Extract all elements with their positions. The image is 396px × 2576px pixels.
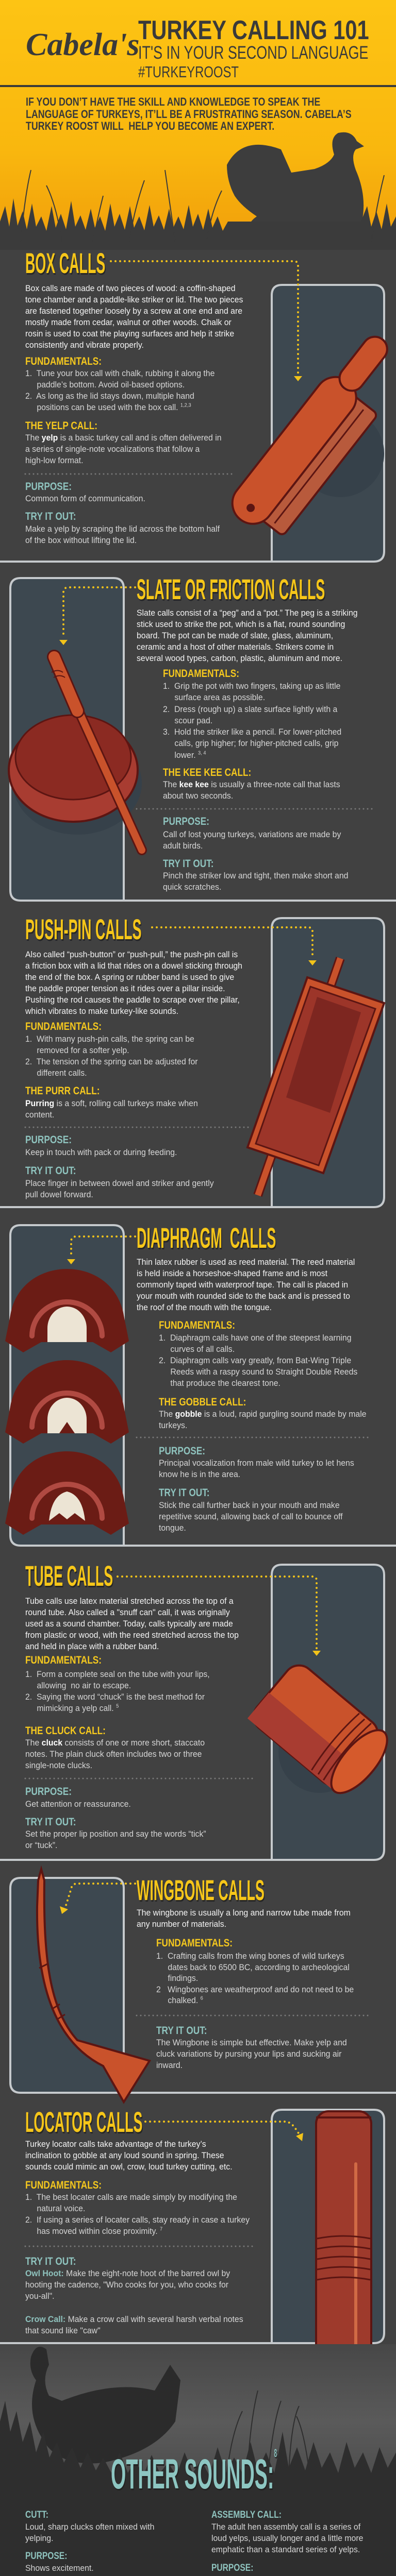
push-pin fundamentals label: FUNDAMENTALS: xyxy=(25,1021,102,1032)
text: Shows excitement. xyxy=(25,2563,94,2573)
push-pin purpose xyxy=(25,1134,177,1157)
tube description: round tube. Also called a "snuff can" call, it was originally xyxy=(25,1607,230,1617)
yelp call label: THE YELP CALL: xyxy=(25,420,97,432)
illustration: slate pot call xyxy=(9,657,142,850)
diaphragm description xyxy=(137,1257,355,1312)
box fundamentals list: positions can be used with the box call. 1,2,3 xyxy=(37,402,191,412)
slate fundamentals list: 2. Dress (rough up) a slate surface lightly with a xyxy=(163,704,337,714)
heading: box calls: BOX CALLS xyxy=(25,247,105,279)
panel frame: push-pin xyxy=(0,918,384,1207)
arrow: wingbone dotted xyxy=(60,1884,135,1914)
section dotted dividers xyxy=(25,474,372,2246)
text: TRY IT OUT: xyxy=(25,1165,76,1177)
box calls description: tone chamber and a paddle-like striker or lid. The two pieces xyxy=(25,295,243,304)
illustration: wingbone xyxy=(37,1869,150,2102)
push-pin try it out xyxy=(25,1165,214,1199)
purr text xyxy=(25,1098,198,1120)
text: know he is in the area. xyxy=(159,1469,240,1479)
text: Loud, sharp clucks often mixed with xyxy=(25,2522,154,2532)
tube description: and held in place with a rubber band. xyxy=(25,1641,159,1651)
text: Keep in touch with pack or during feeding. xyxy=(25,1147,177,1157)
purr text: content. xyxy=(25,1110,54,1120)
slate fundamentals label: FUNDAMENTALS: xyxy=(163,668,239,680)
slate fundamentals list: surface area as possible. xyxy=(174,692,265,702)
gobble text: turkeys. xyxy=(159,1420,187,1430)
panel frame: box calls xyxy=(0,285,384,562)
lower turkey silhouette and grass xyxy=(0,2347,396,2499)
push-pin fundamentals list xyxy=(25,1034,198,1078)
wingbone description: The wingbone is usually a long and narrow tube made from xyxy=(137,1908,351,1918)
diaphragm try it out xyxy=(159,1487,343,1533)
tube fundamentals list xyxy=(25,1669,210,1713)
panel frame: wingbone xyxy=(10,1878,396,2093)
diaphragm fundamentals list: curves of all calls. xyxy=(170,1344,235,1354)
slate fundamentals list xyxy=(163,681,341,760)
text: pull dowel forward. xyxy=(25,1190,93,1199)
text: loud yelps, usually longer and a little more xyxy=(211,2533,363,2543)
text: PURPOSE: xyxy=(25,1134,72,1146)
text: Call of lost young turkeys, variations are made by xyxy=(163,829,341,839)
push-pin description: Pushing the rod causes the paddle to scrape over the pillar, xyxy=(25,995,240,1005)
kee kee label: THE KEE KEE CALL: xyxy=(163,767,251,778)
kee kee text: about two seconds. xyxy=(163,791,233,801)
panel frame: tube xyxy=(0,1565,384,1860)
purr text: Purring is a soft, rolling call turkeys make when xyxy=(25,1098,198,1108)
text: Stick the call further back in your mouth and make xyxy=(159,1500,340,1510)
tube fundamentals list: mimicking a yelp call. 5 xyxy=(37,1703,119,1713)
slate description: ceramic and a host of other materials. Strikers come in xyxy=(137,642,334,652)
text: you-all". xyxy=(25,2291,55,2301)
wingbone fundamentals list: 2 Wingbones are weatherproof and do not need to be xyxy=(156,1985,354,1994)
text: quick scratches. xyxy=(163,882,221,892)
text: cluck variations by pursing your lips and sucking air xyxy=(156,2049,341,2059)
gobble text: The gobble is a loud, rapid gurgling sound made by male xyxy=(159,1409,367,1419)
arrow: locator dotted xyxy=(145,2122,303,2141)
text: Get attention or reassurance. xyxy=(25,1799,131,1809)
slate fundamentals list: lower. 3, 4 xyxy=(174,750,206,760)
heading: locator calls: LOCATOR CALLS xyxy=(25,2106,142,2138)
wingbone fundamentals list: chalked. 6 xyxy=(168,1995,203,2005)
arrow: slate dotted xyxy=(59,587,135,645)
diaphragm fundamentals label: FUNDAMENTALS: xyxy=(159,1319,235,1331)
text: Common form of communication. xyxy=(25,494,145,503)
cluck text xyxy=(25,1738,205,1770)
slate description xyxy=(137,608,358,663)
heading: tube calls: TUBE CALLS xyxy=(25,1560,113,1592)
illustration: box call xyxy=(224,326,396,547)
slate description: board. The pot can be made of slate, glass, aluminum, xyxy=(137,631,333,640)
tube purpose xyxy=(25,1786,131,1809)
text: The adult hen assembly call is a series of xyxy=(211,2522,360,2532)
panel frame: locator xyxy=(0,2110,384,2343)
heading: wingbone calls: WINGBONE CALLS xyxy=(137,1874,265,1906)
tube description xyxy=(25,1596,239,1651)
wingbone description: any number of materials. xyxy=(137,1919,226,1929)
diaphragm fundamentals list: Reeds with a raspy sound to Straight Double Reeds xyxy=(170,1367,357,1377)
slate purpose xyxy=(163,816,341,851)
text: PURPOSE: xyxy=(25,2551,67,2562)
tube description: used as a sound chamber. Today, calls typically are made xyxy=(25,1619,233,1629)
text: hooting the cadence, "Who cooks for you, who cooks for xyxy=(25,2280,228,2290)
yelp call text xyxy=(25,433,222,465)
wingbone fundamentals list: findings. xyxy=(168,1973,198,1983)
locator description: inclination to gobble at any loud sound in spring. These xyxy=(25,2150,224,2160)
box fundamentals list: 1. Tune your box call with chalk, rubbing it along the xyxy=(25,368,214,378)
tube fundamentals label: FUNDAMENTALS: xyxy=(25,1654,102,1666)
text: PURPOSE: xyxy=(25,481,72,493)
locator fundamentals list: 1. The best locater calls are made simply by modifying the xyxy=(25,2192,237,2202)
tube description: from plastic or wood, with the reed stretched across the top xyxy=(25,1630,239,1640)
panel frame: diaphragm xyxy=(10,1225,396,1546)
text: inward. xyxy=(156,2060,183,2070)
box fundamentals label: FUNDAMENTALS: xyxy=(25,355,102,367)
text: ASSEMBLY CALL: xyxy=(211,2510,282,2520)
kee kee text: The kee kee is usually a three-note call that lasts xyxy=(163,779,340,789)
locator description: Turkey locator calls take advantage of the turkey’s xyxy=(25,2139,206,2149)
text: PURPOSE: xyxy=(163,816,209,827)
box fundamentals list xyxy=(25,368,214,412)
diaphragm description: commonly taped with waterproof tape. The call is placed in xyxy=(137,1280,348,1290)
text: TRY IT OUT: xyxy=(156,2025,207,2037)
yelp call text: The yelp is a basic turkey call and is often delivered in xyxy=(25,433,222,443)
diaphragm purpose xyxy=(159,1445,354,1479)
box purpose xyxy=(25,481,145,503)
box calls description: are fastened together loosely by a screw at one end and are xyxy=(25,306,242,316)
header turkey silhouette xyxy=(227,132,364,252)
slate fundamentals list: 3. Hold the striker like a pencil. For lower-pitched xyxy=(163,727,341,737)
push-pin description: the paddle proper tension as it rides over a pillar inside. xyxy=(25,984,225,993)
slate description: Slate calls consist of a “peg” and a “pot.” The peg is a striking xyxy=(137,608,358,618)
text: TRY IT OUT: xyxy=(25,2256,76,2267)
illustration: push-pin call xyxy=(248,958,384,1195)
header logo: Cabela's xyxy=(26,27,139,62)
wingbone description xyxy=(137,1908,351,1929)
wingbone fundamentals list: 1. Crafting calls from the wing bones of wild turkeys xyxy=(156,1951,344,1961)
intro text: TURKEY ROOST WILL HELP YOU BECOME AN EXPERT. xyxy=(26,120,274,132)
intro text: IF YOU DON’T HAVE THE SKILL AND KNOWLEDGE TO SPEAK THE xyxy=(26,95,320,108)
locator fundamentals list xyxy=(25,2192,250,2236)
box calls description xyxy=(25,283,243,350)
box calls description: mostly made from cedar, walnut or other woods. Chalk or xyxy=(25,317,232,327)
arrow: box calls dotted xyxy=(111,261,302,381)
heading: push-pin calls: PUSH-PIN CALLS xyxy=(25,913,142,945)
diaphragm description: is held inside a horseshoe-shaped frame and is most xyxy=(137,1268,327,1278)
slate try it out xyxy=(163,858,348,892)
slate fundamentals list: calls, grip higher; for higher-pitched calls, grip xyxy=(174,738,338,748)
arrow: tube dotted xyxy=(118,1577,321,1656)
push-pin description: the end of the box. A spring or rubber band is used to give xyxy=(25,972,234,982)
text: TRY IT OUT: xyxy=(25,511,76,522)
wingbone fundamentals list: dates back to 6500 BC, according to archeological xyxy=(168,1962,350,1972)
locator try it out xyxy=(25,2256,243,2335)
tube description: Tube calls use latex material stretched across the top of a xyxy=(25,1596,234,1606)
text: adult birds. xyxy=(163,841,203,851)
text: Set the proper lip position and say the words “tick” xyxy=(25,1829,206,1839)
diaphragm fundamentals list: 2. Diaphragm calls vary greatly, from Bat-Wing Triple xyxy=(159,1355,351,1365)
title: TURKEY CALLING 101 xyxy=(138,15,369,45)
box calls description: rosin is used to coat the playing surfaces and help it strike xyxy=(25,329,234,338)
box fundamentals list: 2. As long as the lid stays down, multiple hand xyxy=(25,391,194,401)
text: Crow Call: Make a crow call with several harsh verbal notes xyxy=(25,2314,243,2324)
illustration: locator call xyxy=(316,2111,371,2379)
yelp call text: a series of single-note vocalizations that follow a xyxy=(25,444,200,454)
text: tongue. xyxy=(159,1523,186,1533)
cluck label: THE CLUCK CALL: xyxy=(25,1725,106,1737)
box calls description: Box calls are made of two pieces of wood: a coffin-shaped xyxy=(25,283,235,293)
box fundamentals list: paddle’s bottom. Avoid oil-based options. xyxy=(37,380,185,389)
heading: diaphragm calls: DIAPHRAGM CALLS xyxy=(137,1222,276,1254)
yelp call text: high-low format. xyxy=(25,455,83,465)
slate description: several wood types, carbon, plastic, aluminum and more. xyxy=(137,653,342,663)
text: Place finger in between dowel and striker and gently xyxy=(25,1178,214,1188)
push-pin description: which vibrates to make turkey-like sounds. xyxy=(25,1006,178,1016)
locator fundamentals list: 2. If using a series of locater calls, stay ready in case a turkey xyxy=(25,2215,250,2225)
panel frame: slate xyxy=(10,578,396,901)
text: TRY IT OUT: xyxy=(163,858,214,870)
push-pin description: Also called “push-button” or “push-pull,” the push-pin call is xyxy=(25,950,238,959)
locator fundamentals label: FUNDAMENTALS: xyxy=(25,2179,102,2191)
wingbone fundamentals list xyxy=(156,1951,354,2005)
illustration: diaphragm calls xyxy=(5,1269,129,1535)
push-pin fundamentals list: 1. With many push-pin calls, the spring can be xyxy=(25,1034,194,1044)
push-pin fundamentals list: different calls. xyxy=(37,1068,87,1078)
gobble text xyxy=(159,1409,367,1430)
text: PURPOSE: xyxy=(25,1786,72,1798)
diaphragm fundamentals list: 1. Diaphragm calls have one of the steepest learning xyxy=(159,1333,352,1343)
heading: other sounds: OTHER SOUNDS:8 xyxy=(111,2447,277,2498)
cluck text: notes. The plain cluck often includes two or three xyxy=(25,1749,202,1759)
diaphragm description: the roof of the mouth with the tongue. xyxy=(137,1302,272,1312)
push-pin fundamentals list: 2. The tension of the spring can be adjusted for xyxy=(25,1057,198,1066)
cluck text: The cluck consists of one or more short, staccato xyxy=(25,1738,205,1748)
tube try it out xyxy=(25,1816,206,1850)
other sound: assembly call xyxy=(211,2510,363,2576)
slate fundamentals list: 1. Grip the pot with two fingers, taking up as little xyxy=(163,681,340,691)
text: PURPOSE: xyxy=(211,2563,253,2573)
arrow: diaphragm dotted xyxy=(67,1236,135,1264)
text: The Wingbone is simple but effective. Make yelp and xyxy=(156,2038,347,2047)
header grass xyxy=(0,170,396,255)
push-pin description: a friction box with a lid that rides on a dowel sticking through xyxy=(25,961,242,971)
tube fundamentals list: 1. Form a complete seal on the tube with your lips, xyxy=(25,1669,210,1679)
text: Owl Hoot: Make the eight-note hoot of the barred owl by xyxy=(25,2268,230,2278)
text: PURPOSE: xyxy=(159,1445,205,1457)
cluck text: single-note clucks. xyxy=(25,1760,92,1770)
kee kee text xyxy=(163,779,340,801)
diaphragm description: Thin latex rubber is used as reed material. The reed material xyxy=(137,1257,355,1267)
purr label: THE PURR CALL: xyxy=(25,1085,100,1097)
locator description: sounds could mimic an owl, crow, loud turkey cutting, etc. xyxy=(25,2162,233,2172)
text: Make a yelp by scraping the lid across the bottom half xyxy=(25,524,220,534)
text: Pinch the striker low and tight, then make short and xyxy=(163,871,348,880)
box try it out xyxy=(25,511,220,545)
wingbone try it out xyxy=(156,2025,347,2070)
diaphragm fundamentals list xyxy=(159,1333,357,1388)
text: yelping. xyxy=(25,2533,54,2543)
heading: slate calls: SLATE OR FRICTION CALLS xyxy=(137,573,325,605)
push-pin fundamentals list: removed for a softer yelp. xyxy=(37,1045,129,1055)
diaphragm fundamentals list: that produce the clearest tone. xyxy=(170,1378,280,1388)
lower scene background xyxy=(0,2344,396,2576)
arrow: push-pin dotted xyxy=(152,927,317,965)
slate fundamentals list: scour pad. xyxy=(174,716,212,725)
text: Principal vocalization from male wild turkey to let hens xyxy=(159,1458,354,1468)
wingbone fundamentals label: FUNDAMENTALS: xyxy=(156,1937,233,1949)
text: CUTT: xyxy=(25,2510,48,2520)
other sound: cutt xyxy=(25,2510,154,2573)
box calls description: consistently and vibrate properly. xyxy=(25,340,144,350)
text: or “tuck”. xyxy=(25,1840,57,1850)
text: that sound like "caw" xyxy=(25,2326,101,2335)
locator fundamentals list: has moved within close proximity. 7 xyxy=(37,2226,162,2236)
locator description xyxy=(25,2139,233,2172)
diaphragm description: your mouth with rounded side to the back and is pressed to xyxy=(137,1291,350,1301)
slate description: stick used to strike the pot, which is a flat, round sounding xyxy=(137,619,345,629)
tube fundamentals list: allowing no air to escape. xyxy=(37,1681,131,1690)
gobble label: THE GOBBLE CALL: xyxy=(159,1396,246,1408)
intro text xyxy=(26,95,352,132)
text: repetitive sound, allowing back of call to bounce off xyxy=(159,1512,343,1521)
intro text: LANGUAGE OF TURKEYS, IT’LL BE A FRUSTRATING SEASON. CABELA’S xyxy=(26,107,352,121)
locator fundamentals list: natural voice. xyxy=(37,2204,85,2213)
text: of the box without lifting the lid. xyxy=(25,535,137,545)
illustration: tube call xyxy=(248,1659,396,1802)
hashtag: #TURKEYROOST xyxy=(138,63,239,81)
text: TRY IT OUT: xyxy=(159,1487,210,1499)
subtitle: IT'S IN YOUR SECOND LANGUAGE xyxy=(138,43,368,63)
text: TRY IT OUT: xyxy=(25,1816,76,1828)
push-pin description xyxy=(25,950,242,1016)
text: emphatic than a standard series of yelps. xyxy=(211,2545,360,2554)
tube fundamentals list: 2. Saying the word “chuck” is the best method for xyxy=(25,1692,205,1702)
header background xyxy=(0,0,396,250)
